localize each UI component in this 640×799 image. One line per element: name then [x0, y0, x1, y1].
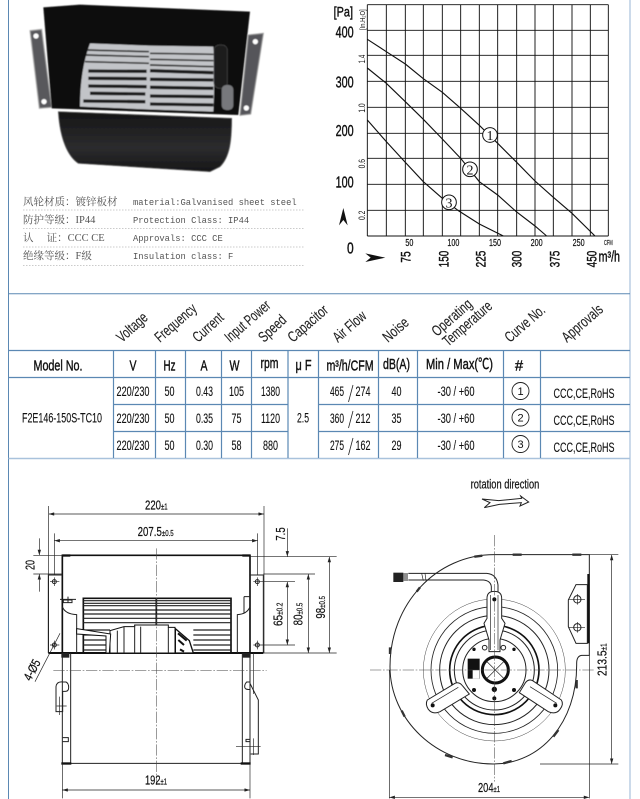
curve 1: [367, 39, 595, 236]
height dimensions: 20: [24, 560, 38, 570]
y axis labels: [334, 4, 354, 257]
rotated table column headers: Speed: [255, 312, 290, 346]
curve marker 2: 2: [466, 163, 473, 178]
performance chart: [334, 4, 620, 267]
row 2: 35: [392, 411, 402, 426]
table header row: W: [230, 358, 240, 374]
table grid: [8, 350, 630, 458]
row 1: 105: [229, 384, 244, 399]
row 2: 50: [164, 411, 174, 426]
specification table: [8, 350, 630, 458]
side view technical drawing: [21, 498, 337, 798]
height dimensions: 98±0.5: [314, 596, 328, 619]
m3/h axis labels: [398, 250, 620, 267]
curve marker 1: [483, 128, 497, 144]
curve marker 1: 1: [486, 129, 493, 144]
y axis labels: 200: [336, 123, 354, 140]
front view technical drawing: [370, 478, 618, 798]
height dimensions: 7.5: [274, 527, 288, 541]
row 1: 465: [330, 384, 344, 399]
inH2O axis labels: 1.0: [357, 103, 367, 113]
m3/h axis labels: 225: [473, 251, 489, 267]
CFM axis labels: [405, 238, 613, 249]
row 3: 220/230: [116, 438, 150, 453]
curve marker 3: [442, 195, 456, 211]
specification text: Approvals: CCC CE: [133, 234, 223, 244]
table header row: μ F: [296, 358, 312, 374]
rotated table column headers: Approvals: [558, 301, 607, 346]
row 3: 0.30: [196, 438, 213, 453]
specification text: material:Galvanised sheet steel: [133, 198, 297, 208]
row 1: [116, 382, 614, 402]
dimensions: 213.5±1: [595, 643, 609, 676]
specification text: 绝缘等级：F级: [23, 249, 92, 262]
CFM axis labels: CFM: [604, 238, 613, 247]
curve marker 2: [463, 162, 477, 178]
product photo: blower fan: [30, 5, 263, 172]
fan wheel: [83, 598, 231, 653]
curve 2: [367, 68, 547, 236]
table header row: #: [515, 358, 523, 374]
height dimensions: [24, 527, 337, 653]
y axis labels: 100: [336, 174, 354, 191]
lower body details: [56, 653, 261, 755]
motor arms: [426, 591, 562, 713]
specification text: 防护等级：IP44: [23, 213, 96, 226]
row 3: 880: [263, 438, 278, 453]
table header row: Model No.: [34, 358, 82, 374]
row 3: 50: [164, 438, 174, 453]
row 3: 3: [517, 439, 524, 451]
width dimensions: 220±1: [145, 498, 168, 512]
width dimensions: 207.5±0.5: [138, 525, 174, 539]
table header row: Hz: [164, 358, 176, 374]
row 1: -30 / +60: [438, 384, 474, 399]
rotated table column headers: Capacitor: [284, 302, 332, 346]
mounting bracket: [568, 585, 587, 643]
table header row: dB(A): [383, 357, 410, 373]
motor: [77, 625, 193, 653]
CFM axis labels: 100: [447, 238, 460, 249]
row 3: 29: [392, 438, 402, 453]
width dimensions: [49, 498, 264, 798]
specification text: Insulation class: F: [133, 252, 233, 262]
rotated table column headers: Curve No.: [501, 302, 549, 346]
inH2O axis labels: 1.4: [357, 55, 367, 63]
dimensions: 204±1: [478, 781, 500, 795]
row 2: 360: [330, 411, 344, 426]
table header row: rpm: [260, 356, 278, 372]
model name: F2E146-150S-TC10: [22, 410, 102, 426]
hole callout: [21, 633, 60, 683]
row 2: -30 / +60: [438, 411, 474, 426]
CFM axis labels: 250: [573, 238, 585, 249]
row 1: 220/230: [116, 384, 150, 399]
row 3: 275: [330, 438, 344, 453]
table header row: V: [130, 358, 137, 374]
y axis labels: [Pa]: [334, 4, 353, 20]
rotation arrow: [482, 496, 529, 508]
row 2: 220/230: [116, 411, 150, 426]
m3/h axis labels: 450: [584, 251, 600, 267]
inH2O axis labels: [In.H₂O]: [358, 9, 367, 30]
row 1: 1: [517, 386, 524, 398]
housing outline: [48, 554, 263, 765]
row 1: 274: [356, 384, 371, 399]
row 1: 40: [392, 384, 402, 399]
scroll housing: [390, 555, 590, 764]
rotated table column headers: Voltage: [113, 309, 151, 346]
rotated table column headers: Input Power: [221, 297, 274, 346]
curve marker 3: 3: [445, 196, 452, 211]
capacitor value: 2.5: [297, 410, 309, 426]
row 1: 50: [164, 384, 174, 399]
row 3: 162: [356, 438, 370, 453]
centre lines: [370, 535, 594, 782]
row 2: [116, 409, 614, 428]
row 1: 1380: [261, 384, 280, 399]
rotated table column headers: Current: [189, 309, 228, 346]
motor rings: [423, 599, 565, 741]
wire and connector: [393, 573, 498, 593]
axis arrows: [339, 208, 385, 262]
row 2: 212: [356, 411, 370, 426]
row 1: 0.43: [196, 384, 213, 399]
height dimensions: 65±0.2: [272, 602, 286, 626]
curve 3: [367, 120, 503, 236]
table header row: Min / Max(℃): [426, 357, 493, 373]
m3/h axis labels: 300: [509, 251, 525, 267]
m3/h axis labels: 150: [435, 251, 451, 267]
row 3: [116, 436, 614, 455]
specification text: Protection Class: IP44: [133, 216, 249, 226]
CFM axis labels: 150: [489, 238, 501, 249]
rotated table column headers: Air Flow: [329, 308, 370, 346]
specification text: [23, 195, 305, 266]
y axis labels: 300: [336, 74, 354, 91]
rotated table column headers: Operating: [428, 296, 476, 340]
dimensions: [389, 555, 618, 798]
row 2: 0.35: [196, 411, 213, 426]
specification text: 风轮材质：镀锌板材: [23, 195, 118, 208]
row 3: 58: [232, 438, 242, 453]
row 2: 1120: [261, 411, 280, 426]
motor hub: [468, 648, 516, 700]
y axis labels: 0: [347, 240, 354, 257]
row 3: -30 / +60: [438, 438, 474, 453]
rotated table column headers: Temperature: [439, 298, 496, 350]
table header row: A: [200, 358, 208, 374]
y axis labels: 400: [336, 24, 354, 41]
row 2: 75: [232, 411, 242, 426]
hole callout: 4-Ø5: [21, 657, 44, 683]
rotated table column headers: Frequency: [151, 300, 201, 346]
centre lines: [53, 548, 267, 785]
rotated table column headers: [113, 296, 607, 350]
width dimensions: 192±1: [145, 774, 167, 788]
m3/h axis labels: 75: [398, 251, 414, 263]
mounting holes: [50, 577, 295, 649]
height dimensions: 80±0.5: [292, 602, 306, 625]
CFM axis labels: 200: [531, 238, 543, 249]
rotation direction label: rotation direction: [471, 478, 539, 492]
row 2: 2: [517, 412, 524, 424]
m3/h axis labels: 375: [546, 251, 562, 267]
inH2O axis labels: 0.2: [357, 211, 367, 220]
CFM axis labels: 50: [405, 238, 414, 249]
inH2O axis labels: [357, 9, 367, 220]
specification text: 认 证：CCC CE: [23, 231, 105, 244]
inH2O axis labels: 0.6: [357, 159, 367, 168]
table header row: m³/h/CFM: [326, 358, 374, 374]
table header row: [34, 356, 523, 374]
rotated table column headers: Noise: [379, 314, 413, 346]
m3/h axis labels: m³/h: [599, 250, 620, 266]
